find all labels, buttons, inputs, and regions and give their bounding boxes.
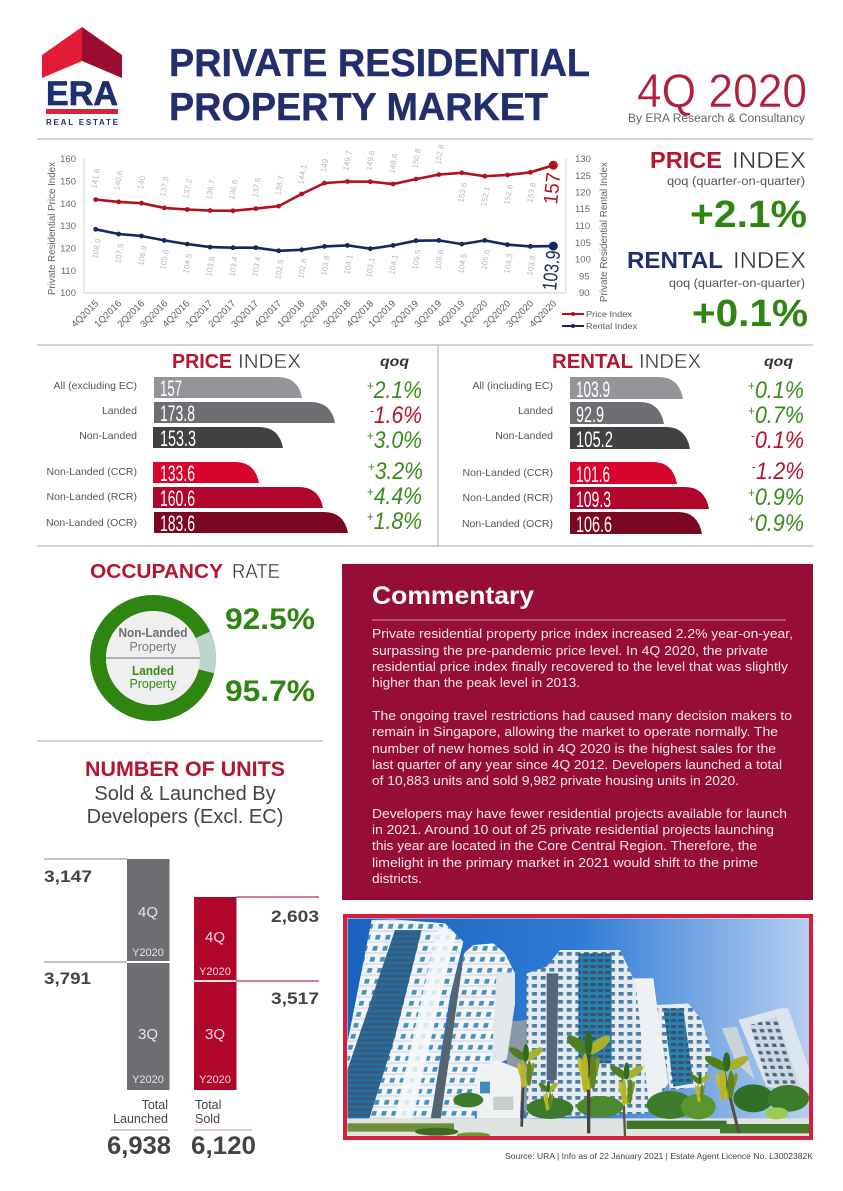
row labels: Non-Landed <box>79 430 137 442</box>
commentary text: higher than the peak level in 2013. <box>372 675 580 690</box>
heading: INDEX <box>639 351 701 373</box>
heading: INDEX <box>238 351 301 373</box>
donut chart <box>98 603 216 713</box>
icon: roof left <box>42 27 82 78</box>
x axis labels: 3Q2020 <box>504 298 536 330</box>
qoq changes: 1.6% <box>374 402 422 429</box>
x axis labels: 4Q2018 <box>344 298 376 330</box>
summary: rental index: +0.1% <box>692 293 808 335</box>
chart: units sold <box>191 897 319 1160</box>
chart: units sold: 6,120 <box>191 1132 256 1160</box>
left axis ticks: 110 <box>61 266 76 277</box>
right axis ticks: 115 <box>575 204 590 215</box>
rental index data labels: 106.9 <box>136 244 149 266</box>
qoq changes: - <box>752 459 756 474</box>
rental index data labels: 102.5 <box>273 258 286 280</box>
right towers <box>722 1027 755 1080</box>
x axis labels: 2Q2018 <box>298 298 330 330</box>
chart: units sold: 2,603 <box>271 907 319 926</box>
period heading: 4Q 2020 <box>637 64 807 117</box>
commentary heading: Commentary <box>372 582 534 610</box>
commentary text: Developers may have fewer residential projects available for launch <box>372 806 787 821</box>
qoq changes: + <box>368 459 375 474</box>
x axis labels: 1Q2020 <box>458 298 490 330</box>
price index data labels: 149.7 <box>341 149 354 171</box>
price index data labels <box>89 143 538 207</box>
rental index data labels: 105.6 <box>158 248 171 270</box>
row labels: Non-Landed (OCR) <box>46 517 137 529</box>
left axis ticks: 140 <box>60 199 76 210</box>
title: PROPERTY MARKET <box>169 86 548 129</box>
left axis ticks: 130 <box>60 221 76 232</box>
qoq changes: 0.1% <box>755 377 804 404</box>
left axis ticks: 100 <box>60 288 76 299</box>
rental index data labels: 102.8 <box>296 257 309 279</box>
heading: qoq <box>380 353 410 369</box>
bar values: 101.6 <box>576 462 610 487</box>
qoq changes: 2.1% <box>373 377 422 404</box>
summary: price index: +2.1% <box>690 194 807 236</box>
line chart: price and rental index <box>47 143 638 331</box>
price index data labels: 140.6 <box>112 169 125 191</box>
left axis title: Private Residential Price Index <box>47 162 58 295</box>
qoq changes: 0.1% <box>755 427 804 454</box>
bars <box>153 377 348 533</box>
right axis ticks: 90 <box>579 288 590 299</box>
rental index data labels: 104.3 <box>502 252 515 274</box>
rental index data labels: 105.6 <box>479 248 492 270</box>
commentary text <box>372 626 793 886</box>
rental index data labels <box>90 237 538 280</box>
left axis ticks: 160 <box>60 154 76 165</box>
price index data labels: 150.8 <box>410 147 423 169</box>
heading <box>552 351 794 373</box>
summary: rental index: INDEX <box>733 247 806 273</box>
qoq changes: 0.7% <box>755 402 804 429</box>
row labels: Non-Landed (CCR) <box>47 466 137 478</box>
chart: units launched: 3,147 <box>44 867 92 886</box>
chart: units launched: Y2020 <box>132 947 164 959</box>
left axis ticks: 150 <box>60 176 76 188</box>
qoq changes: 1.2% <box>756 458 804 485</box>
qoq changes: + <box>748 485 755 500</box>
row labels: All (excluding EC) <box>54 380 137 392</box>
callout: latest rental value: 103.9 <box>539 249 565 292</box>
bar values: 109.3 <box>576 487 611 512</box>
right axis ticks: 110 <box>575 221 590 232</box>
rental index data labels: 103.4 <box>227 255 240 277</box>
rental index data labels: 104.5 <box>181 252 194 274</box>
logo: ERA Real Estate <box>42 27 122 127</box>
price index data labels: 137.9 <box>158 175 171 197</box>
commentary text: of 10,883 units and sold 9,982 private housing units in 2020. <box>372 773 739 788</box>
chart: units sold: Total <box>195 1098 221 1112</box>
summary: rental index <box>627 247 808 335</box>
rental index line <box>93 227 558 253</box>
x axis labels: 1Q2016 <box>92 298 124 330</box>
x axis labels: 3Q2018 <box>321 298 353 330</box>
heading <box>90 560 280 583</box>
bar values: 157 <box>160 376 182 401</box>
title <box>169 42 590 129</box>
price index data labels: 153.8 <box>525 181 538 203</box>
chart: units sold: 4Q <box>205 929 225 946</box>
photo: residential towers with palm trees <box>345 916 811 1138</box>
commentary text: last quarter of any year since 4Q 2012. Developers launched a total <box>372 757 782 772</box>
qoq changes: 0.9% <box>755 484 804 511</box>
price index data labels: 136.7 <box>204 178 217 200</box>
left axis ticks: 120 <box>60 244 76 254</box>
logo wordmark: ERA <box>46 75 118 113</box>
rental index data labels: 104.1 <box>342 253 355 275</box>
right axis ticks: 95 <box>579 272 590 282</box>
qoq changes: 3.2% <box>375 458 423 485</box>
x axis labels: 4Q2016 <box>160 298 192 330</box>
landed occupancy value: 95.7% <box>225 675 315 708</box>
right axis ticks: 105 <box>575 238 591 249</box>
donut chart: Non-Landed <box>118 626 188 640</box>
ground <box>347 1118 809 1137</box>
bar values: 92.9 <box>576 402 604 427</box>
heading: number of units: NUMBER OF UNITS <box>85 758 285 781</box>
x axis labels: 4Q2015 <box>69 298 101 330</box>
commentary text: number of new homes sold in 4Q 2020 is the highest sales for the <box>372 741 776 756</box>
heading: qoq <box>764 353 794 369</box>
commentary text: The ongoing travel restrictions had caused many decision makers to <box>372 708 792 723</box>
bars <box>570 377 709 534</box>
chart legend: Price Index <box>586 309 633 319</box>
right axis ticks <box>575 154 591 299</box>
x axis labels: 2Q2019 <box>389 298 421 330</box>
qoq changes: 0.9% <box>755 510 804 537</box>
left axis ticks <box>60 154 76 299</box>
price index data labels: 137.6 <box>250 176 263 198</box>
qoq changes: + <box>748 403 755 418</box>
chart legend <box>562 309 638 331</box>
donut chart: Property <box>130 640 177 654</box>
bar values: 160.6 <box>160 486 195 511</box>
price index data labels: 152.1 <box>479 185 492 207</box>
summary: rental index: RENTAL <box>627 247 723 273</box>
rental index data labels: 103.8 <box>525 254 538 276</box>
rental index data labels: 105.5 <box>410 248 423 270</box>
chart: units sold: Y2020 <box>199 966 231 978</box>
bar values: 106.6 <box>576 512 612 537</box>
chart: units sold: 3,517 <box>271 989 319 1008</box>
row labels: Non-Landed (RCR) <box>463 492 553 504</box>
summary: price index <box>650 147 807 236</box>
qoq changes <box>748 377 804 537</box>
period heading: By ERA Research & Consultancy <box>628 113 805 125</box>
x axis labels: 2Q2016 <box>115 298 147 330</box>
heading: number of units: Developers (Excl. EC) <box>87 806 283 828</box>
qoq changes: - <box>751 428 755 443</box>
price index data labels: 153.6 <box>456 181 469 203</box>
bar values <box>576 377 613 537</box>
panel: commentary <box>342 564 813 900</box>
price index data labels: 149 <box>319 158 330 173</box>
price index data labels: 137.2 <box>181 177 194 199</box>
summary: price index: qoq (quarter-on-quarter) <box>667 176 805 188</box>
tower D <box>657 1003 712 1090</box>
x axis labels: 1Q2018 <box>275 298 307 330</box>
qoq changes: 1.8% <box>374 508 422 535</box>
qoq changes: + <box>367 428 374 443</box>
bar values <box>160 376 196 536</box>
heading: RENTAL <box>552 351 633 373</box>
centre tower <box>527 950 668 1118</box>
heading: number of units <box>85 758 285 828</box>
chart: units launched: 4Q <box>138 904 158 921</box>
chart: units launched: Launched <box>113 1112 168 1126</box>
price index data labels: 152.8 <box>433 143 446 165</box>
qoq changes: + <box>367 378 374 393</box>
commentary text: this year are located in the Core Central Region. Therefore, the <box>372 838 757 853</box>
palms <box>522 1060 524 1127</box>
summary: price index: INDEX <box>732 147 806 173</box>
low building <box>477 1060 522 1118</box>
x axis labels: 3Q2017 <box>229 298 261 330</box>
rental index data labels: 105.6 <box>433 248 446 270</box>
logo subtitle: REAL ESTATE <box>46 118 119 127</box>
heading: number of units: Sold & Launched By <box>94 783 276 805</box>
heading: OCCUPANCY <box>90 560 223 583</box>
price index data labels: 140 <box>136 175 147 190</box>
heading: RATE <box>232 560 280 583</box>
bar values: 103.9 <box>576 377 610 402</box>
row labels <box>46 380 137 529</box>
chart: units sold: 3Q <box>205 1026 225 1043</box>
commentary text: surpassing the pre-pandemic price level. In 4Q 2020, the private <box>372 643 768 658</box>
qoq changes: 4.4% <box>374 483 422 510</box>
heading <box>172 351 410 373</box>
price index data labels: 136.6 <box>227 178 240 200</box>
price index data labels: 141.6 <box>89 167 102 189</box>
non-landed occupancy value: 92.5% <box>225 603 315 636</box>
right axis ticks: 130 <box>575 154 591 165</box>
source note: Source: URA | Info as of 22 January 2021 | Estate Agent Licence No. L3002382K <box>505 1151 813 1161</box>
bar values: 173.8 <box>160 401 195 426</box>
back filler <box>507 1020 527 1117</box>
donut chart: Landed <box>132 664 174 678</box>
row labels: Non-Landed (CCR) <box>463 467 553 479</box>
x axis labels: 4Q2020 <box>527 298 559 330</box>
x axis labels: 4Q2017 <box>252 298 284 330</box>
rental index data labels: 103.8 <box>319 254 332 276</box>
x axis labels: 2Q2017 <box>206 298 238 330</box>
bar values: 183.6 <box>160 511 195 536</box>
bar values: 153.3 <box>160 426 196 451</box>
x axis labels <box>69 298 559 330</box>
x axis labels: 3Q2019 <box>412 298 444 330</box>
row labels: Non-Landed (RCR) <box>47 491 137 503</box>
commentary text: residential price index finally recovered to the level that was slightly <box>372 659 789 674</box>
chart: units launched: 3Q <box>138 1026 158 1043</box>
row labels: Landed <box>518 405 553 417</box>
chart legend: Rental Index <box>586 321 638 331</box>
right axis ticks: 120 <box>575 188 591 198</box>
price index data labels: 149.6 <box>364 149 377 171</box>
x axis labels: 2Q2020 <box>481 298 513 330</box>
row labels: All (including EC) <box>472 380 553 392</box>
qoq changes: + <box>748 511 755 526</box>
x axis labels: 3Q2016 <box>138 298 170 330</box>
rental index data labels: 103.6 <box>204 255 217 277</box>
price index data labels: 144.1 <box>296 163 309 185</box>
chart: units sold: Y2020 <box>199 1074 231 1086</box>
trees <box>527 1098 573 1119</box>
rental index data labels: 108.9 <box>90 237 103 259</box>
qoq changes: - <box>370 403 374 418</box>
commentary text: in 2021. Around 10 out of 25 private residential projects launching <box>372 822 774 837</box>
commentary text: districts. <box>372 871 422 886</box>
commentary text: limelight in the primary market in 2021 would shift to the prime <box>372 855 758 870</box>
chart: units launched: 3,791 <box>44 969 91 988</box>
logo red bar <box>46 109 118 114</box>
price index data labels: 148.6 <box>387 152 400 174</box>
rental index data labels: 103.4 <box>250 255 263 277</box>
commentary text: remain in Singapore, allowing the market to operate normally. The <box>372 724 778 739</box>
chart: units sold: Sold <box>195 1112 220 1126</box>
commentary text: Private residential property price index increased 2.2% year-on-year, <box>372 626 793 641</box>
title: PRIVATE RESIDENTIAL <box>169 42 590 85</box>
heading: PRICE <box>172 351 232 373</box>
rental index data labels: 103.1 <box>364 256 377 278</box>
panel: price index bars <box>46 351 423 536</box>
row labels: Landed <box>102 405 137 417</box>
qoq changes: + <box>367 484 374 499</box>
bar values: 105.2 <box>576 427 613 452</box>
row labels <box>462 380 553 530</box>
donut chart: Property <box>130 677 177 691</box>
callout: latest price value: 157 <box>540 171 565 206</box>
tower A <box>347 919 463 1123</box>
bar values: 133.6 <box>160 461 195 486</box>
summary: price index: PRICE <box>650 147 722 173</box>
panel: occupancy rate <box>90 560 315 713</box>
chart: units launched: Y2020 <box>132 1074 164 1086</box>
rental index data labels: 104.5 <box>456 252 469 274</box>
chart: units launched: Total <box>142 1098 168 1112</box>
panel: rental index bars <box>462 351 804 537</box>
chart: units launched <box>44 859 171 1160</box>
row labels: Non-Landed <box>495 430 553 442</box>
x axis labels: 1Q2017 <box>183 298 215 330</box>
rental index data labels: 104.1 <box>387 253 400 275</box>
right axis title: Private Residential Rental Index <box>599 162 610 302</box>
right axis ticks: 125 <box>575 171 591 182</box>
qoq changes <box>367 377 423 535</box>
tower B <box>440 943 515 1118</box>
price index data labels: 138.7 <box>273 174 286 196</box>
qoq changes: 3.0% <box>374 427 422 454</box>
price index data labels: 152.6 <box>502 183 515 205</box>
price index line <box>93 161 558 213</box>
right axis ticks: 100 <box>575 254 591 266</box>
row labels: Non-Landed (OCR) <box>462 518 553 530</box>
summary: rental index: qoq (quarter-on-quarter) <box>669 278 805 290</box>
rental index data labels: 107.5 <box>113 242 126 264</box>
chart: units launched: 6,938 <box>107 1132 171 1160</box>
qoq changes: + <box>367 509 374 524</box>
x axis labels: 4Q2019 <box>435 298 467 330</box>
x axis labels: 1Q2019 <box>366 298 398 330</box>
icon: roof right <box>82 27 122 78</box>
qoq changes: + <box>748 378 755 393</box>
